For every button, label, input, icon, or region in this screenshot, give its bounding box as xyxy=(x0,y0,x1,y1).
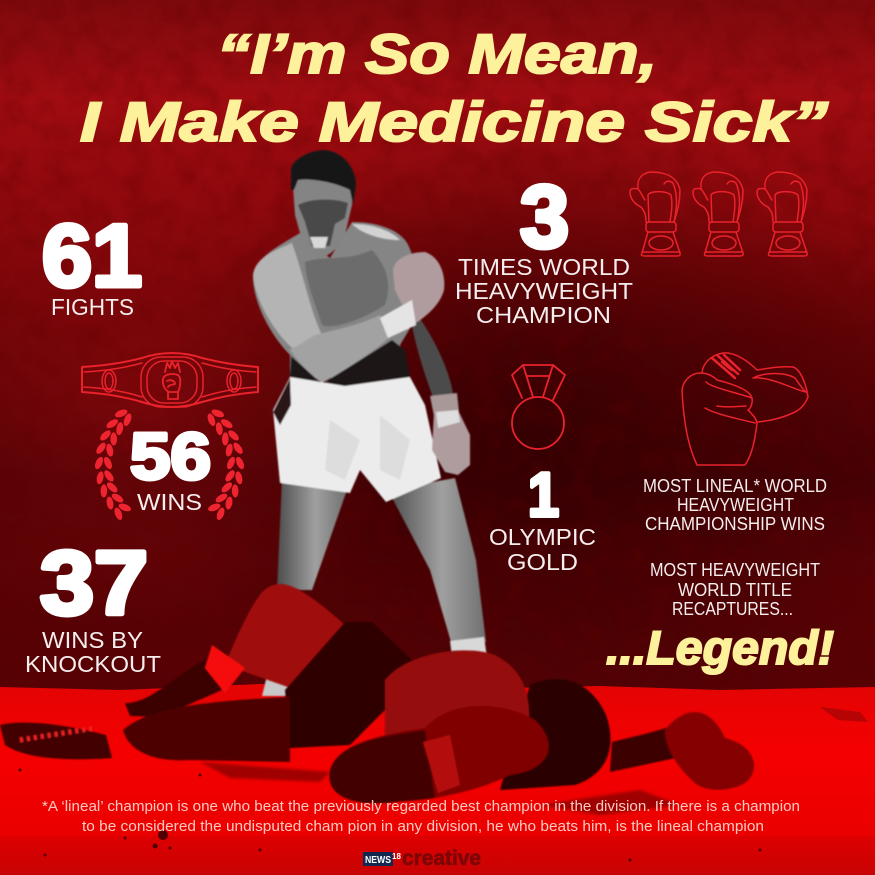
floor shadows xyxy=(200,762,680,815)
footnote: to be considered the undisputed cham pion in any division, he who beats him, is the lineal champion xyxy=(82,819,764,835)
logo: News18 Creative: 18 xyxy=(392,852,401,861)
lower shoe xyxy=(0,723,112,759)
lower leg and thigh xyxy=(123,697,290,762)
torso xyxy=(385,650,529,745)
stat: 37 wins by knockout: 37 xyxy=(40,534,148,634)
forearm xyxy=(290,315,392,383)
head xyxy=(291,150,356,258)
text: most lineal wins: MOST LINEAL* WORLD xyxy=(643,476,827,496)
standing boxer legs xyxy=(262,478,487,696)
shoulder highlight xyxy=(352,224,400,240)
stat: 37 wins by knockout xyxy=(25,534,161,677)
photo: standing boxer xyxy=(253,150,487,696)
lower glove xyxy=(430,393,470,475)
stat: 61 fights: FIGHTS xyxy=(51,294,134,320)
stat: 56 wins xyxy=(130,419,211,515)
big glove xyxy=(330,706,549,802)
text: most title recaptures: MOST HEAVYWEIGHT xyxy=(650,560,820,580)
outstretched arm xyxy=(610,722,705,772)
title: “I’m So Mean, xyxy=(217,22,657,85)
torso xyxy=(253,222,453,397)
text: most lineal wins: CHAMPIONSHIP WINS xyxy=(645,514,825,534)
stat: 3 times world heavyweight champion xyxy=(455,167,633,328)
photo: knocked-down boxer in red xyxy=(0,584,754,815)
stat: 3 times world heavyweight champion: HEAVYWEIGHT xyxy=(455,278,633,304)
stat: 37 wins by knockout: KNOCKOUT xyxy=(25,651,161,677)
stat: 1 Olympic gold: GOLD xyxy=(507,549,578,575)
raised glove xyxy=(393,252,444,325)
glove tape xyxy=(423,735,460,793)
icon: pair of boxing gloves xyxy=(682,353,808,465)
stat: 37 wins by knockout: WINS BY xyxy=(42,627,143,653)
callout: Legend: ...Legend! xyxy=(606,621,834,674)
text: most title recaptures: WORLD TITLE xyxy=(678,580,792,600)
stat: 1 Olympic gold xyxy=(489,461,596,575)
raised leg xyxy=(225,584,345,693)
logo: News18 Creative: creative xyxy=(402,847,481,870)
stat: 56 wins: 56 xyxy=(130,419,211,493)
stat: 3 times world heavyweight champion: CHAMPION xyxy=(476,302,611,328)
icon: three boxing gloves xyxy=(630,172,807,256)
white shorts xyxy=(273,377,441,502)
stat: 61 fights: 61 xyxy=(42,206,142,305)
text: most lineal wins: HEAVYWEIGHT xyxy=(677,495,794,515)
title xyxy=(80,22,828,153)
text: most lineal wins xyxy=(643,476,827,534)
right arm shade xyxy=(412,310,453,397)
wrist tape xyxy=(380,300,416,338)
stat: 56 wins: WINS xyxy=(137,489,202,515)
raised sock xyxy=(205,645,245,693)
text: most title recaptures: RECAPTURES... xyxy=(672,599,793,619)
icon: laurel wreath xyxy=(93,404,246,523)
waistband xyxy=(290,340,410,387)
shorts xyxy=(285,622,412,748)
stat: 3 times world heavyweight champion: TIMES WORLD xyxy=(458,254,630,280)
icon: championship belt xyxy=(82,353,258,407)
raised shoe xyxy=(125,658,222,717)
icon: fist on belt xyxy=(163,361,180,399)
text: most title recaptures xyxy=(650,560,820,619)
head xyxy=(500,679,610,790)
outstretched glove xyxy=(665,712,754,790)
icon: medal xyxy=(512,365,565,449)
title: I Make Medicine Sick” xyxy=(80,90,828,153)
footnote: *A ‘lineal’ champion is one who beat the previously regarded best champion in the division. If there is a champion xyxy=(42,799,800,815)
logo: News18 Creative: NEWS xyxy=(365,854,391,866)
footnote xyxy=(42,799,800,835)
stat: 1 Olympic gold: 1 xyxy=(528,461,559,530)
chest shade xyxy=(305,250,388,326)
left upper arm xyxy=(253,243,322,352)
logo: News18 Creative xyxy=(363,847,481,870)
stat: 1 Olympic gold: OLYMPIC xyxy=(489,524,596,550)
stat: 3 times world heavyweight champion: 3 xyxy=(520,167,569,266)
